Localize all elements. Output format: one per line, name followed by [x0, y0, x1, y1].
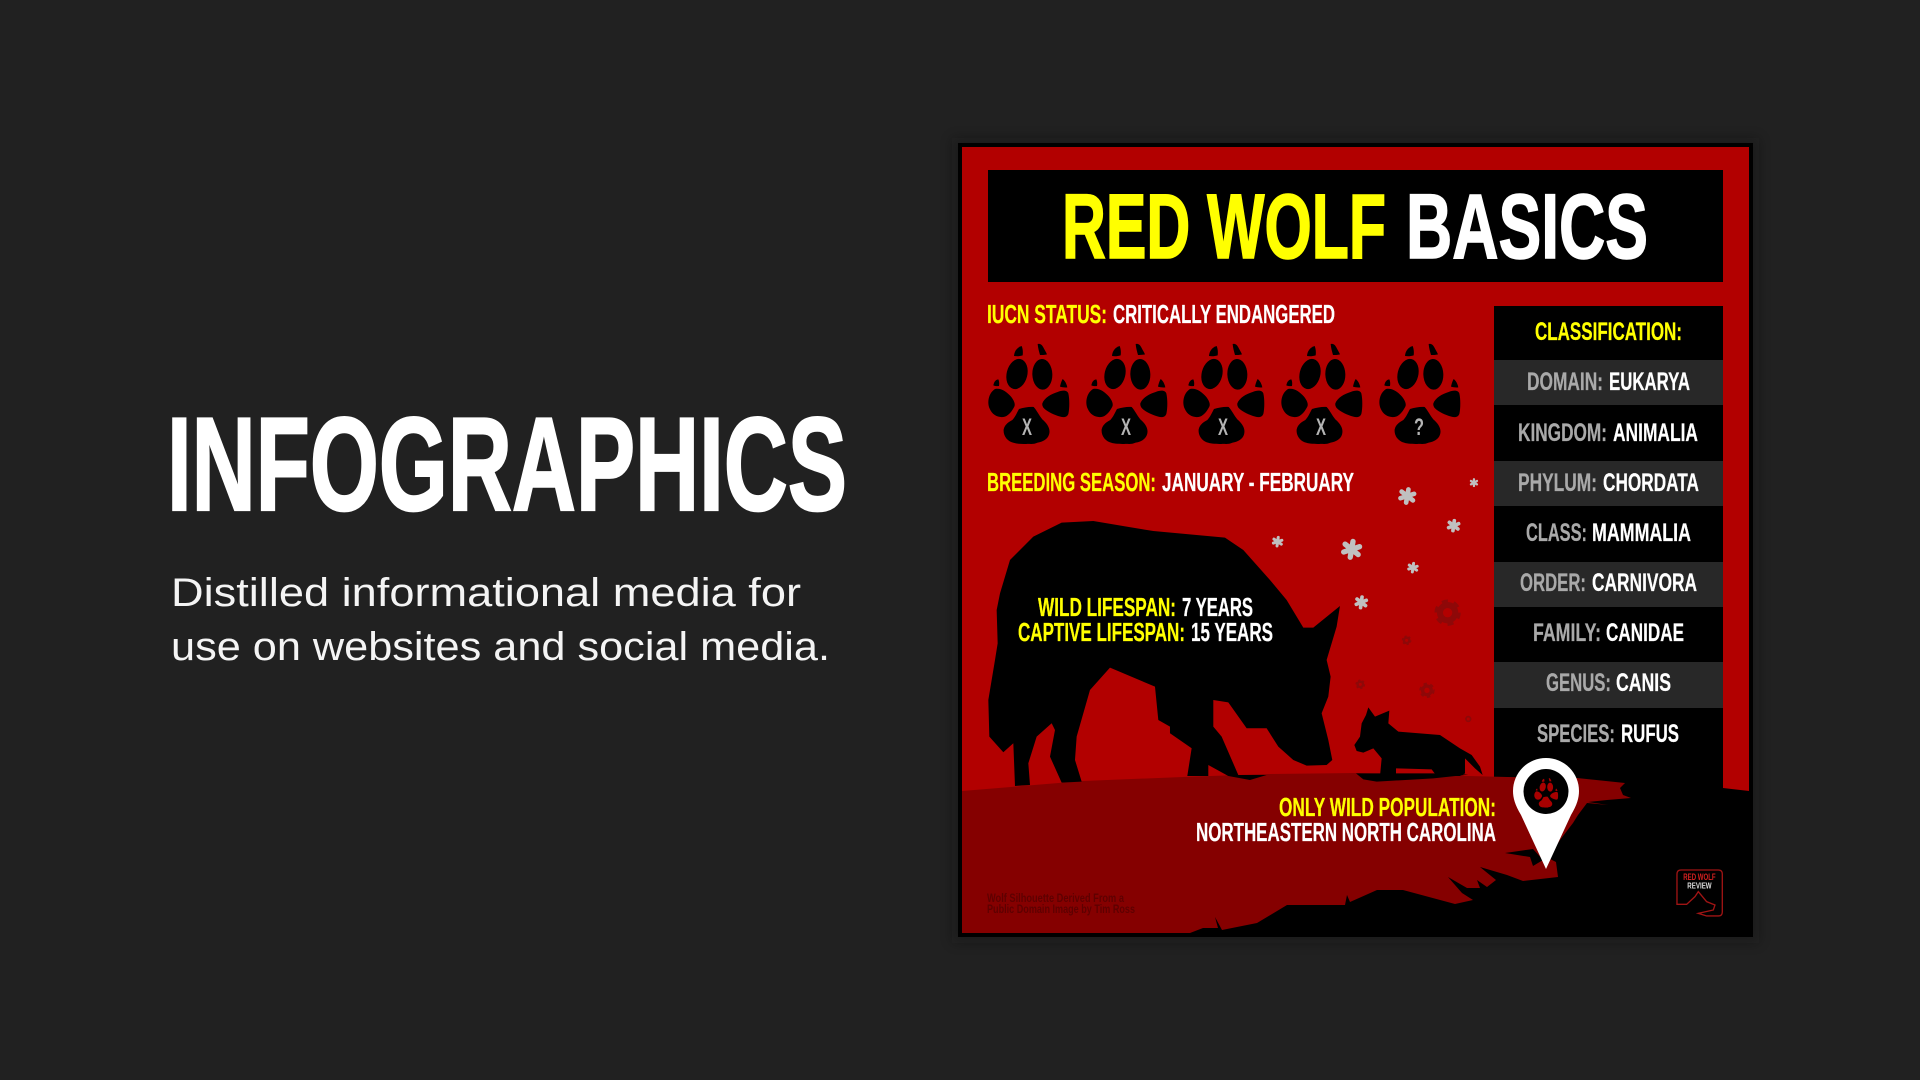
row: phylum	[1494, 461, 1723, 506]
dark red ground	[962, 773, 1631, 933]
breeding season line: BREEDING SEASON:	[987, 467, 1156, 497]
only wild population text: ONLY WILD POPULATION:	[1279, 792, 1496, 822]
text block: description: Distilled informational media for	[171, 571, 801, 615]
snowflakes and flowers	[1273, 479, 1477, 721]
black ground underlay	[1190, 800, 1749, 933]
icon: paw X 2: X	[1121, 414, 1131, 441]
row: phylum: PHYLUM:	[1518, 469, 1597, 497]
logo: red wolf review	[1677, 870, 1722, 916]
paw icons row	[988, 344, 1460, 444]
row: domain: EUKARYA	[1609, 368, 1690, 396]
row: domain: DOMAIN:	[1527, 368, 1603, 396]
heading: infographics: INFOGRAPHICS	[167, 391, 847, 539]
row: species: RUFUS	[1621, 720, 1679, 748]
row: order: ORDER:	[1520, 569, 1586, 597]
row: phylum: CHORDATA	[1603, 469, 1699, 497]
only wild population text	[1196, 792, 1496, 847]
icon: paw X 2	[1086, 344, 1167, 444]
row: class	[1526, 519, 1691, 547]
icon: paw X 3	[1183, 344, 1264, 444]
logo: red wolf review: RED WOLF	[1683, 872, 1716, 882]
icon: paw X 4	[1281, 344, 1362, 444]
lifespan text: 15 YEARS	[1191, 617, 1273, 647]
icon: paw X 1	[988, 344, 1069, 444]
text block: description: use on websites and social media.	[171, 625, 830, 669]
row: kingdom: ANIMALIA	[1613, 419, 1698, 447]
row: class: MAMMALIA	[1592, 519, 1691, 547]
only wild population text: NORTHEASTERN NORTH CAROLINA	[1196, 817, 1496, 847]
wolf pup silhouette	[1354, 707, 1483, 782]
classification panel	[1494, 306, 1749, 933]
title banner: RED WOLF	[1062, 176, 1386, 278]
row: kingdom: KINGDOM:	[1518, 419, 1607, 447]
IUCN status line	[987, 299, 1335, 329]
icon: location pin	[1513, 758, 1579, 869]
row: genus: CANIS	[1616, 669, 1671, 697]
logo: red wolf review: REVIEW	[1687, 881, 1712, 891]
attribution text	[987, 891, 1135, 916]
title banner: BASICS	[1406, 176, 1648, 278]
icon: paw X 1: X	[1022, 414, 1032, 441]
text block: description	[171, 571, 830, 669]
lifespan text: 7 YEARS	[1182, 592, 1253, 622]
wolf silhouette	[988, 521, 1340, 786]
row: genus	[1494, 662, 1723, 708]
title banner	[988, 170, 1723, 282]
lifespan text	[1018, 592, 1273, 647]
card shadow	[952, 138, 1759, 943]
classification heading: CLASSIFICATION:	[1535, 318, 1682, 346]
icon: paw X 3: X	[1218, 414, 1228, 441]
icon: paw question mark	[1379, 344, 1460, 444]
row: order: CARNIVORA	[1592, 569, 1697, 597]
row: family: FAMILY:	[1533, 619, 1601, 647]
row: class: CLASS:	[1526, 519, 1587, 547]
IUCN status line: CRITICALLY ENDANGERED	[1113, 299, 1335, 329]
lifespan text: CAPTIVE LIFESPAN:	[1018, 617, 1185, 647]
row: domain	[1494, 360, 1723, 405]
icon: paw question mark: ?	[1414, 414, 1424, 441]
lifespan text: WILD LIFESPAN:	[1038, 592, 1176, 622]
row: family	[1533, 619, 1684, 647]
attribution text: Public Domain Image by Tim Ross	[987, 902, 1135, 916]
icon: paw X 4: X	[1316, 414, 1326, 441]
row: order	[1494, 562, 1723, 607]
attribution text: Wolf Silhouette Derived From a	[987, 891, 1124, 905]
row: genus: GENUS:	[1546, 669, 1611, 697]
panel: red wolf basics infographic	[958, 143, 1753, 937]
breeding season line: JANUARY - FEBRUARY	[1162, 467, 1354, 497]
row: family: CANIDAE	[1606, 619, 1684, 647]
ground spike near pin	[1505, 849, 1543, 866]
row: species: SPECIES:	[1537, 720, 1615, 748]
IUCN status line: IUCN STATUS:	[987, 299, 1107, 329]
